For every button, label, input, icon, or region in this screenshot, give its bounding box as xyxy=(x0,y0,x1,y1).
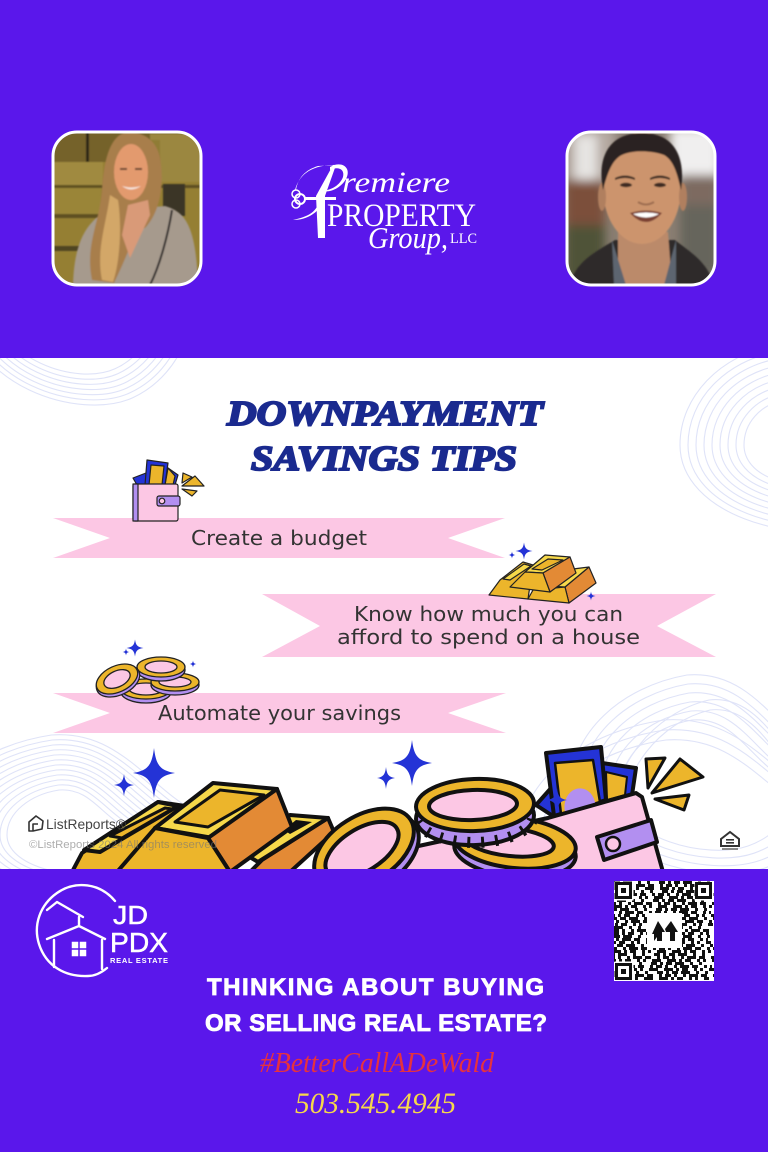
tip 3: automate your savings: Automate your savings xyxy=(158,701,401,725)
hashtag: #BetterCallADeWald xyxy=(260,1048,495,1079)
icon: wallet small xyxy=(133,460,204,521)
call to action heading: OR SELLING REAL ESTATE? xyxy=(205,1010,547,1037)
phone number: 503.545.4945 xyxy=(295,1087,456,1120)
title: SAVINGS TIPS xyxy=(251,439,517,478)
tip 2: know how much: afford to spend on a house xyxy=(337,625,640,649)
logo: Premiere Property Group: LLC xyxy=(450,231,477,247)
JD PDX logo xyxy=(37,885,168,976)
panel: white tips section xyxy=(0,358,768,869)
QR code xyxy=(614,881,714,981)
JD PDX logo: JD xyxy=(113,900,148,930)
call to action heading: THINKING ABOUT BUYING xyxy=(207,974,544,1001)
tip 2: know how much: Know how much you can xyxy=(354,602,623,626)
tip 1: create a budget xyxy=(53,518,505,558)
icon: large sparkle on wallet xyxy=(550,788,567,806)
logo: Premiere Property Group: Group, xyxy=(368,220,448,255)
photo: man xyxy=(565,128,720,285)
icon: gold bars small xyxy=(489,555,596,603)
title: DOWNPAYMENT xyxy=(226,394,545,433)
logo: Premiere Property Group xyxy=(292,164,477,255)
logo: Premiere Property Group: remiere xyxy=(342,166,450,199)
tip 1: create a budget: Create a budget xyxy=(191,526,367,550)
copyright note: ©ListReports 2024 All rights reserved xyxy=(29,839,217,851)
icon: sparkles gold bars xyxy=(508,542,596,600)
icon: large sparkles xyxy=(114,740,432,798)
icon: large coins xyxy=(312,776,578,869)
icon: equal housing xyxy=(721,832,739,850)
icon: coins small xyxy=(91,657,199,703)
icon: sparkles coins xyxy=(122,640,196,668)
ListReports logo: ListReports® xyxy=(46,816,127,832)
JD PDX logo: REAL ESTATE xyxy=(110,956,168,965)
tip 3: automate your savings xyxy=(53,693,506,733)
tip 2: know how much xyxy=(262,594,716,657)
call to action heading xyxy=(205,974,547,1037)
photo: woman xyxy=(53,132,201,285)
title xyxy=(226,394,545,478)
icon: large gold bars xyxy=(72,783,334,872)
logo: Premiere Property Group: PROPERTY xyxy=(327,198,476,234)
JD PDX logo: PDX xyxy=(110,927,168,958)
icon: large wallet xyxy=(400,747,703,872)
illustration: large gold bars, coins and wallet xyxy=(71,740,705,869)
